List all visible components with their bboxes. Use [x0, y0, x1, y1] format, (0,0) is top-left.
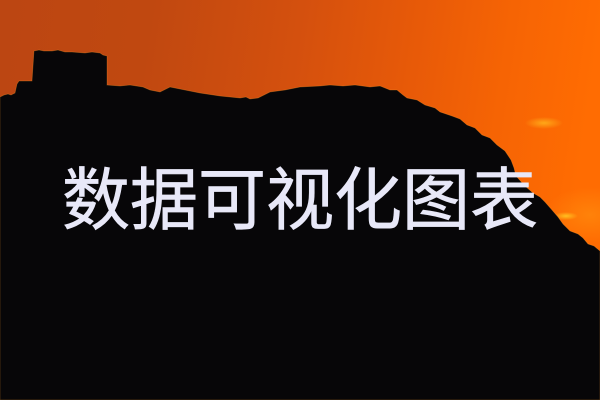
sun-lit clouds — [525, 117, 578, 220]
title: 数据可视化图表 — [62, 163, 538, 239]
